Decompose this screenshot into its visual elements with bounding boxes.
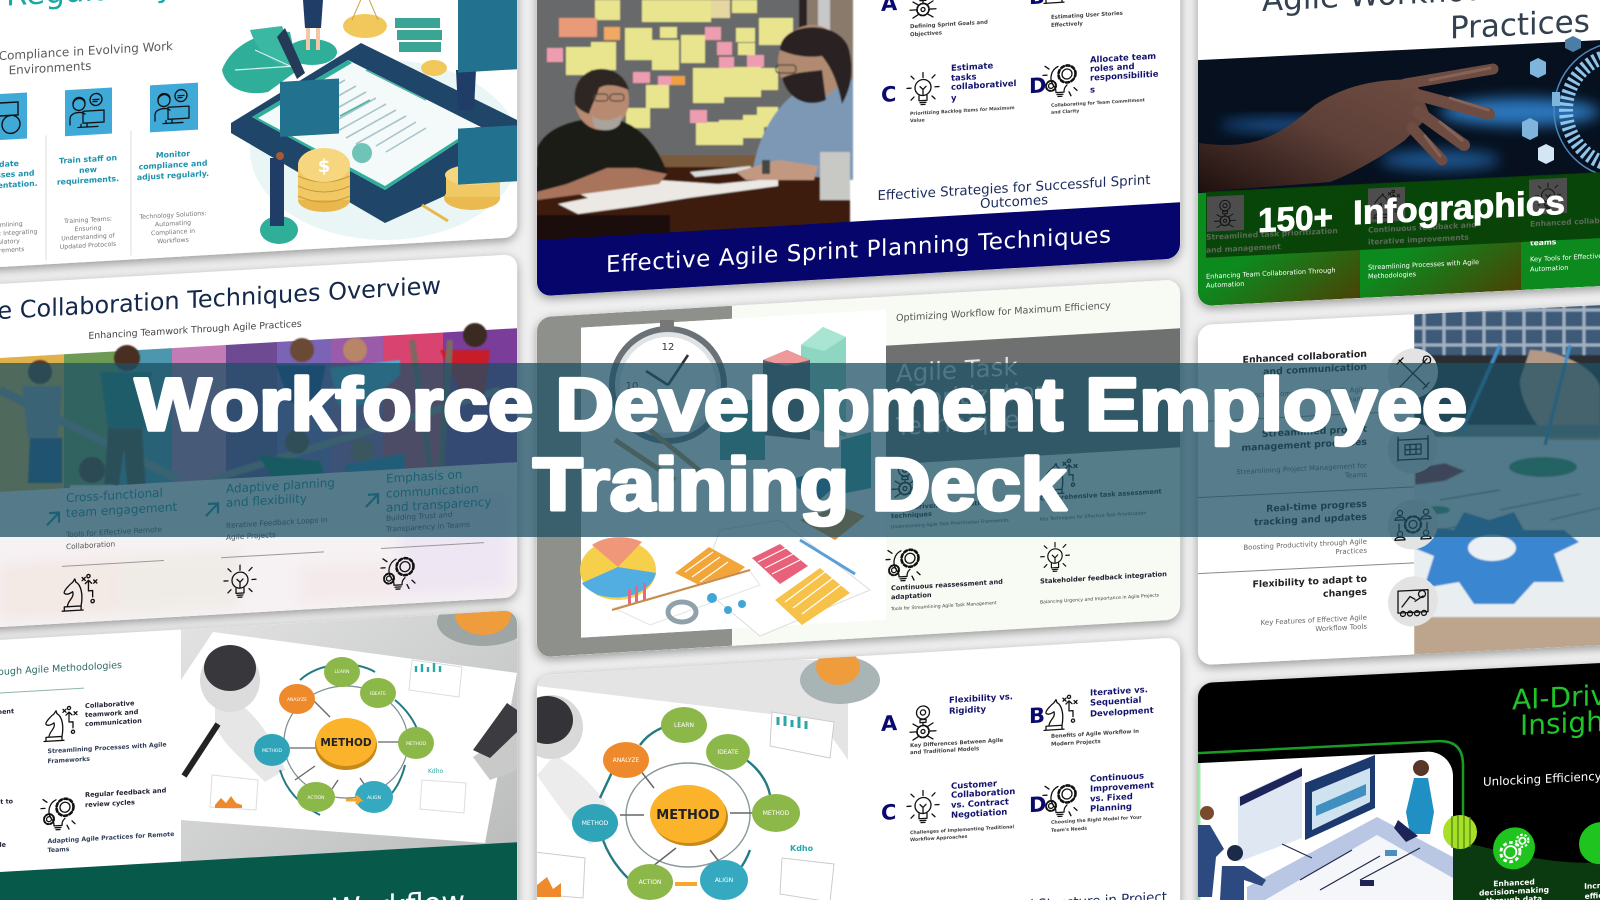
photo: hand touching digital interface [1198, 11, 1600, 217]
gray title block: Agile Task [896, 352, 1018, 388]
feature: value-driven prioritization [891, 468, 1008, 528]
cropped left column text [0, 707, 14, 851]
slide subtitle: Effective Strategies for Successful Sprint [877, 173, 1151, 204]
feature rows: tracking and updates [1254, 512, 1367, 528]
grid item D: Choosing the Right Model for Your [1051, 815, 1142, 826]
photo: method diagram on desk [181, 610, 517, 862]
column: train staff: Train staff on [59, 153, 117, 166]
feature: regular feedback and review cycles: Adapting Agile Practices for Remote [48, 831, 174, 845]
feature: enhanced decision-making: decision-making [1479, 885, 1549, 898]
photo: method diagram close-up: METHOD [656, 808, 720, 823]
photo: method diagram close-up: ACTION [639, 879, 661, 886]
photo: method diagram on desk: ALIGN [367, 795, 381, 801]
grid item D: D [1029, 72, 1046, 98]
grid item A: Key Differences Between Agile [910, 738, 1004, 749]
grid item C: Value [910, 117, 925, 124]
feature rows: and communication [1263, 362, 1367, 378]
photo: hands sketching gears [1414, 295, 1600, 655]
feature: regular feedback and review cycles: review cycles [85, 798, 135, 809]
photo: two men planning at sticky note wall [530, 0, 853, 257]
gray title block: Prioritization [896, 376, 1050, 414]
feature: stakeholder feedback integration: Stakeholder feedback integration [1040, 570, 1167, 586]
grid item D: roles and [1090, 62, 1135, 75]
feature: adaptive planning and flexibility: Agile Projects [226, 530, 276, 542]
grid item A: Defining Sprint Goals and [910, 20, 988, 30]
feature: comprehensive task assessment: Key Techniques for Effective Task Prioritization [1040, 510, 1146, 523]
slide subtitle: Enhancing Teamwork Through Agile Practices [88, 319, 302, 342]
feature: adaptive planning and flexibility [206, 476, 335, 599]
feature: emphasis on communication and transparency: Emphasis on [386, 467, 462, 486]
grid item B: B [1029, 702, 1045, 728]
grid item A: A [881, 710, 898, 736]
column: monitor compliance: Workflows [157, 237, 189, 245]
column: monitor compliance [137, 82, 209, 247]
photo: method diagram on desk: METHOD [320, 737, 372, 749]
grid item D [1029, 52, 1159, 117]
grid item D: and Clarity [1051, 108, 1079, 116]
grid item A [881, 0, 988, 40]
grid item B [1029, 685, 1154, 749]
overlay label: 150+ Infographics: 150+ [1258, 198, 1333, 240]
grid item C: tasks [951, 72, 977, 84]
dark callout band: iterative improvements [1368, 233, 1469, 247]
feature: regular feedback and review cycles: Regular feedback and [85, 786, 167, 799]
photo: method diagram close-up: IDEATE [717, 749, 739, 756]
feature rows: Teams [1344, 395, 1367, 404]
slide subtitle: Environments [9, 59, 91, 78]
photo: method diagram close-up: METHOD [582, 820, 609, 827]
green feature cells: Automation [1206, 280, 1244, 290]
footer band with heading: Effective Agile Sprint Planning Techniques [606, 222, 1111, 278]
main title [135, 363, 1467, 526]
photo: method diagram close-up: METHOD [763, 810, 790, 817]
feature: stakeholder feedback integration: Balancing Urgency and Importance in Agile Projects [1040, 593, 1160, 606]
column: monitor compliance: compliance and [139, 159, 207, 172]
feature rows: changes [1323, 587, 1367, 600]
feature rows: Key Features of Effective Agile [1261, 614, 1367, 627]
grid item C: Workflow Approaches [910, 834, 968, 843]
gray image frame [537, 306, 732, 657]
feature: enhanced decision-making [1479, 826, 1549, 900]
grid item C: collaborativel [951, 79, 1017, 93]
white text panel edge [1198, 314, 1414, 665]
panel: sprint planning slide [530, 0, 1190, 301]
grid item C: Customer [951, 779, 998, 792]
grid item C: Negotiation [951, 808, 1007, 821]
column: train staff: Updated Protocols [60, 241, 116, 251]
grid item A: and Traditional Models [910, 746, 979, 756]
feature: cross-functional team engagement [47, 485, 177, 612]
grid item C: C [881, 81, 896, 107]
green feature cells: Methodologies [1368, 270, 1417, 281]
feature: cross-functional team engagement: Collaboration [66, 539, 116, 551]
feature: enhanced decision-making: Enhanced [1493, 877, 1535, 888]
slide subtitle: Optimizing Workflow for Maximum Efficiency [896, 300, 1111, 324]
grid item D: Collaborating for Team Commitment [1051, 97, 1146, 109]
column: train staff: Understanding of [61, 232, 116, 242]
feature rows: management processes [1241, 437, 1367, 454]
grid item C [882, 62, 1016, 122]
green feature cells: Automation [1530, 264, 1568, 274]
illustration: clock, 3D bars and charts: 10 [626, 381, 638, 392]
panel: AI-driven insights slide [1170, 661, 1600, 900]
panel: collaboration techniques overview slide [0, 254, 517, 630]
photo: method diagram close-up: LEARN [674, 722, 694, 729]
teal placeholder blocks [280, 0, 517, 195]
feature rows: Practices [1335, 547, 1367, 556]
feature: adaptive planning and flexibility: and flexibility [226, 491, 307, 510]
grid item C: Collaboration [951, 787, 1015, 801]
feature: collaborative teamwork and communication: Collaborative [85, 699, 135, 710]
feature: collaborative teamwork and communication [44, 697, 167, 765]
photo: team on colored stairs [0, 322, 517, 492]
grid item D: Allocate team [1090, 52, 1156, 66]
gray title block: Techniques [895, 404, 1032, 441]
grid item C: C [881, 799, 896, 825]
illustration: compliance tablet with coins: $ [318, 156, 330, 177]
illustration: clock, 3D bars and charts [580, 320, 871, 636]
grid item C: y [951, 93, 957, 104]
column: train staff: requirements. [57, 174, 119, 187]
photo: method diagram on desk: IDEATE [370, 691, 386, 697]
feature rows: Real-time progress [1266, 499, 1367, 515]
slide subtitle: Outcomes [980, 193, 1048, 212]
column: monitor compliance: Automating [155, 219, 191, 229]
feature: comprehensive task assessment: Comprehensive task assessment [1040, 487, 1162, 503]
feature: value-driven prioritization: techniques [891, 510, 932, 520]
illustration: clock, 3D bars and charts: 12 [662, 342, 674, 353]
grid item A: Objectives [910, 30, 942, 38]
grid item A: Flexibility vs. [949, 692, 1013, 706]
column: monitor compliance: Compliance in [151, 228, 195, 237]
feature: collaborative teamwork and communication: teamwork and [85, 708, 139, 719]
grid item D: vs. Fixed [1090, 792, 1133, 805]
grid item C [881, 778, 1015, 845]
column: train staff: Training Teams: [63, 216, 112, 225]
grid item B: Estimating User Stories [1051, 11, 1123, 21]
feature: emphasis on communication and transparency: Building Trust and [386, 510, 453, 523]
grid item B: Iterative vs. [1090, 685, 1148, 699]
panel: agile task prioritization slide [537, 279, 1186, 657]
icon circles [1388, 347, 1438, 628]
dark green hill [1453, 840, 1600, 900]
feature rows: Streamlined project [1262, 424, 1368, 440]
column: monitor compliance: Monitor [156, 149, 190, 160]
grid item B: Benefits of Agile Workflow in [1051, 729, 1139, 740]
photo: method diagram close-up: ALIGN [715, 877, 733, 884]
dark callout band: Streamlined task prioritization [1206, 226, 1338, 242]
footer band with heading [530, 202, 1190, 301]
feature: stakeholder feedback integration [1040, 542, 1166, 604]
feature rows: Teams [1344, 471, 1367, 480]
panel: agile methodologies slide [0, 608, 524, 900]
panel: agile workflow tools slide [1198, 0, 1600, 306]
feature: continuous reassessment: adaptation [891, 591, 932, 601]
feature: continuous reassessment [886, 544, 1003, 613]
feature: emphasis on communication and transparency: and transparency [386, 495, 491, 515]
column: train staff [57, 87, 119, 251]
overlay label: 150+ Infographics [1258, 184, 1565, 240]
grid item B: Modern Projects [1051, 739, 1101, 748]
gray title block [886, 328, 1186, 465]
overlay label: 150+ Infographics: Infographics [1353, 184, 1565, 232]
title banner [0, 363, 1600, 537]
photo: method diagram close-up [519, 649, 880, 900]
feature rows: Flexibility to adapt to [1252, 574, 1368, 590]
photo: method diagram on desk: METHOD [406, 741, 426, 747]
striped accent ball [1443, 815, 1477, 849]
feature rows: Enhanced collaboration [1243, 349, 1367, 366]
photo: method diagram on desk: LEARN [335, 669, 349, 675]
grid item D: responsibilitie [1090, 70, 1159, 84]
panel: regulatory compliance slide [0, 0, 520, 277]
grid item D: Planning [1090, 802, 1132, 815]
feature: increased efficiency [1579, 821, 1600, 900]
photo: method diagram on desk: ACTION [307, 795, 325, 801]
column: monitor compliance: Technology Solutions: [138, 210, 207, 221]
illustration: analysts with dashboards [1170, 740, 1463, 900]
grid item D [1029, 771, 1154, 835]
panel: agile vs traditional comparison slide [519, 610, 1180, 900]
feature: collaborative teamwork and communication: Frameworks [48, 756, 90, 765]
grid item B: Effectively [1051, 21, 1083, 29]
feature: value-driven prioritization: Value-driven prioritization [891, 499, 989, 512]
feature: collaborative teamwork and communication: Streamlining Processes with Agile [48, 741, 167, 755]
feature rows [1236, 349, 1368, 637]
illustration: compliance tablet with coins [222, 0, 520, 244]
green feature cells: Enhancing Team Collaboration Through [1206, 266, 1335, 281]
slide heading: Practices [1450, 4, 1590, 47]
feature: regular feedback and review cycles [41, 786, 174, 855]
green feature cells [1198, 171, 1600, 306]
feature rows: Boosting Productivity through Agile [1243, 538, 1367, 552]
dark callout band: and management [1206, 242, 1281, 255]
feature rows: Enhancing Communication with Agile [1236, 386, 1367, 400]
column: update processes [0, 92, 38, 256]
main title: Training Deck [533, 443, 1067, 526]
feature: adaptive planning and flexibility: Adaptive planning [226, 476, 335, 496]
feature: cross-functional team engagement: Cross-functional [66, 486, 163, 505]
photo: method diagram close-up: Kdho [790, 844, 814, 853]
grid item B [1030, 0, 1123, 27]
feature rows: Streamlining Project Management for [1236, 462, 1367, 476]
main title: Workforce Development Employee [135, 363, 1467, 446]
feature: continuous reassessment: Tools for Streamlining Agile Task Management [890, 600, 997, 612]
grid item C: Prioritizing Backlog Items for Maximum [910, 105, 1015, 117]
feature: comprehensive task assessment [1040, 454, 1162, 523]
feature: emphasis on communication and transparency: Transparency in Teams [385, 520, 470, 534]
green feature cells: teams [1530, 237, 1557, 248]
feature: emphasis on communication and transparency: communication [386, 481, 479, 501]
grid item C: vs. Contract [951, 797, 1009, 811]
feature: cross-functional team engagement: Tools for Effective Remote [65, 525, 163, 539]
column: train staff: Ensuring [74, 225, 102, 233]
panel: workflow tools features slide [1198, 284, 1600, 676]
feature: continuous reassessment: Continuous reassessment and [891, 578, 1003, 592]
feature: cross-functional team engagement: team engagement [66, 500, 177, 520]
grid item D: D [1029, 791, 1046, 817]
faded photo background [0, 462, 517, 628]
feature: value-driven prioritization: Understanding Agile Task Prioritization Frameworks [891, 517, 1009, 530]
grid item B: Development [1090, 706, 1154, 720]
feature: adaptive planning and flexibility: Iterative Feedback Loops in [226, 515, 328, 530]
photo: method diagram on desk: Kdho [428, 768, 444, 775]
feature rows: Workflow Tools [1315, 623, 1367, 633]
feature: collaborative teamwork and communication: communication [85, 717, 142, 728]
green feature cells: Streamlining Processes with Agile [1368, 258, 1479, 272]
grid item D: Team's Needs [1051, 826, 1087, 834]
slide subtitle: Unlocking Efficiency [1483, 769, 1600, 789]
feature: regular feedback and review cycles: Teams [48, 846, 70, 854]
grid item C: Estimate [951, 61, 993, 74]
grid item D: Continuous [1090, 771, 1144, 785]
grid item D: Improvement [1090, 781, 1154, 795]
grid item C: Challenges of Implementing Traditional [910, 824, 1014, 836]
grid item A [881, 692, 1013, 758]
grid item A: Rigidity [949, 705, 986, 717]
column: train staff: new [79, 165, 97, 175]
photo: method diagram on desk: ANALYZE [287, 697, 307, 703]
grid item B: Sequential [1090, 696, 1142, 709]
footer band with heading [0, 842, 520, 900]
photo: method diagram on desk: METHOD [262, 748, 282, 754]
feature: emphasis on communication and transparency [366, 466, 491, 591]
dark callout band: Continuous feedback and [1368, 220, 1477, 235]
grid item D: s [1090, 85, 1095, 96]
column: monitor compliance: adjust regularly. [137, 169, 209, 182]
photo: method diagram close-up: ANALYZE [613, 757, 640, 764]
dark callout band [1206, 169, 1600, 258]
